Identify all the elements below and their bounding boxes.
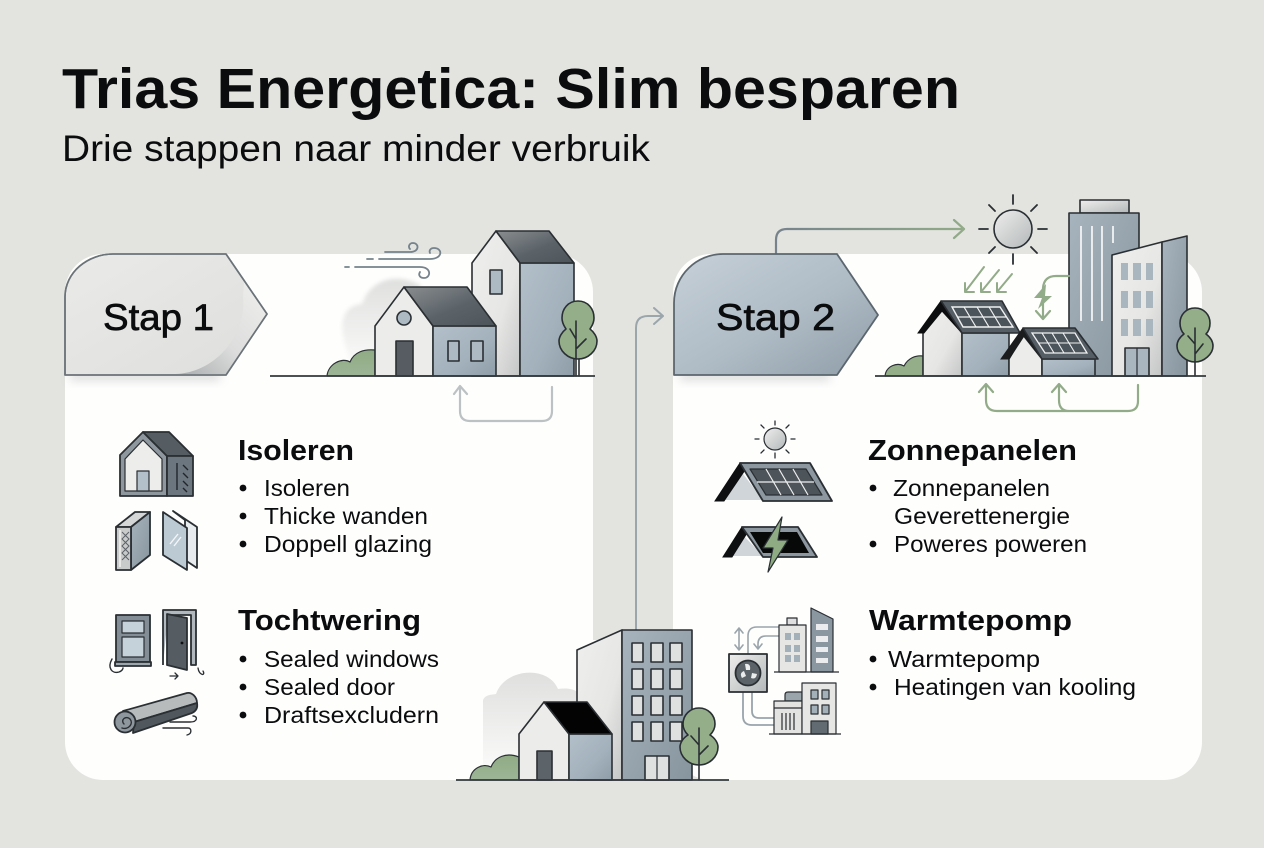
icon: double glazing (163, 511, 197, 570)
section: Isoleren text: Isoleren (264, 475, 350, 501)
illustration: step 2 buildings (875, 195, 1213, 411)
tree (680, 708, 718, 780)
section: Isoleren text: Doppell glazing (264, 531, 432, 557)
step 1 badge: Stap 1 (103, 297, 214, 338)
small house (375, 287, 496, 376)
section: Tochtwering text: Tochtwering (238, 605, 421, 637)
icon: heat pump (729, 608, 841, 734)
section: Zonnepanelen text: Zonnepanelen (868, 435, 1077, 467)
icon: insulation block (116, 512, 150, 570)
icon: draft excluder roll (114, 693, 197, 735)
section: Zonnepanelen text (868, 435, 1087, 557)
ground line (875, 375, 1206, 377)
subtitle: Drie stappen naar minder verbruik (62, 128, 651, 169)
ground line (456, 779, 729, 781)
panel: step 1 (65, 254, 593, 780)
tower (1069, 200, 1139, 376)
section: Zonnepanelen text: Geverettenergie (894, 503, 1070, 529)
section: Isoleren text: Thicke wanden (264, 503, 428, 529)
icon: solar roof with bolt (723, 517, 817, 572)
icon: solar roof (715, 463, 832, 501)
step 2 badge: Stap 2 (716, 297, 835, 338)
section: Tochtwering text: Sealed windows (264, 646, 439, 672)
bush (327, 350, 375, 376)
icon: sealed door (163, 610, 204, 679)
illustration: step 1 houses (270, 231, 597, 421)
section: Isoleren text: Isoleren (238, 435, 354, 467)
icon: wind (345, 243, 440, 278)
bush (470, 755, 519, 780)
tree (1177, 308, 1213, 376)
tall house (472, 231, 574, 376)
icon: sun (979, 195, 1047, 264)
bush (885, 356, 923, 376)
arrow: energy return (979, 384, 1138, 411)
ground line (270, 375, 595, 377)
section: Tochtwering text: Sealed door (264, 674, 395, 700)
solar house large (918, 301, 1020, 376)
section: Tochtwering text: Draftsexcludern (264, 702, 439, 728)
house (519, 702, 612, 780)
step 1 badge (65, 254, 267, 380)
arrow: step 2 to sun (776, 220, 964, 254)
office block (577, 630, 692, 780)
arrow: loop (454, 386, 552, 421)
section: Warmtepomp text: Warmtepomp (888, 646, 1040, 672)
section: Zonnepanelen text: Poweres poweren (894, 531, 1087, 557)
icon: insulated house (120, 432, 193, 496)
section: Warmtepomp text: Heatingen van kooling (894, 674, 1136, 700)
title: Trias Energetica: Slim besparen (62, 57, 960, 121)
icon: sealed window (110, 615, 151, 672)
icon: sun small (755, 421, 795, 458)
office building (1112, 236, 1187, 376)
section: Warmtepomp text (869, 605, 1136, 700)
section: Tochtwering text (238, 605, 439, 728)
panel bridge between steps (585, 640, 681, 780)
upper buildings (787, 618, 797, 625)
connector and bolt (1034, 276, 1069, 319)
arrows: sunlight (965, 267, 1012, 292)
step 2 badge (674, 254, 878, 380)
panel: step 2 (673, 254, 1202, 780)
illustration: bottom buildings (456, 630, 729, 780)
solar house small (1001, 328, 1098, 376)
lower buildings (785, 692, 802, 701)
arrow: step 1 to step 2 (636, 308, 663, 632)
pipes (735, 627, 779, 653)
section: Warmtepomp text: Warmtepomp (869, 605, 1072, 637)
section: Isoleren text (238, 435, 432, 557)
section: Zonnepanelen text: Zonnepanelen (893, 475, 1050, 501)
tree (559, 301, 597, 376)
